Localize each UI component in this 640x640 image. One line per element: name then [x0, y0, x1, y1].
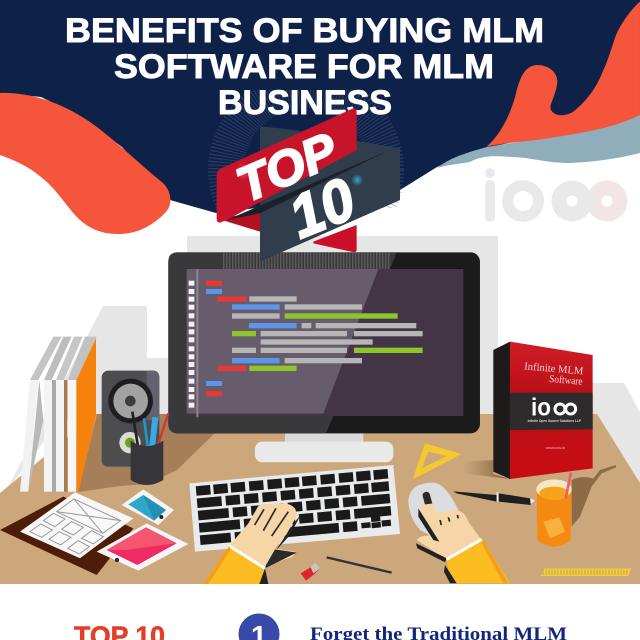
title [65, 12, 544, 122]
left desk items [0, 337, 188, 575]
line numbers [189, 281, 194, 408]
keyboard and left hand [189, 465, 400, 584]
navy wave [0, 0, 640, 213]
monitor [168, 252, 480, 462]
header background blobs [0, 0, 640, 234]
screen [187, 269, 463, 416]
books [20, 337, 97, 492]
monitor stand [255, 432, 393, 462]
sunburst rays [226, 90, 386, 250]
red ribbon tail [313, 225, 357, 252]
mouse [408, 483, 458, 543]
title: BUSINESS [218, 84, 392, 122]
10 label: 10 [280, 165, 364, 251]
right sleeve [447, 540, 510, 583]
left sleeve [203, 546, 265, 584]
code lines [206, 281, 423, 396]
right hand [416, 503, 510, 583]
glow red [235, 163, 252, 180]
software box: Software [549, 374, 583, 388]
faint logo watermark [485, 168, 620, 222]
dark ribbon front [260, 148, 400, 262]
title: BENEFITS OF BUYING MLM [65, 12, 544, 50]
red wave left [0, 93, 170, 234]
red wave right [487, 2, 640, 147]
title: SOFTWARE FOR MLM [114, 48, 494, 86]
right desk items [408, 342, 631, 583]
keyboard body [189, 465, 400, 552]
speaker [102, 371, 159, 467]
software box: www.ioss.in [546, 446, 565, 450]
pencil [327, 557, 392, 573]
keys [196, 469, 392, 545]
blue grey wave right [437, 115, 640, 168]
ruler [541, 569, 631, 576]
TOP label: TOP [229, 123, 345, 213]
wireframe sheet on mat [0, 492, 133, 575]
software box [493, 342, 593, 479]
box shadow [463, 460, 510, 479]
box logo: io [531, 394, 551, 421]
desk [0, 414, 640, 584]
box caption: Infinite Open Source Solutions LLP [528, 419, 582, 423]
grey wall shapes behind desk [5, 236, 640, 493]
left hand [203, 503, 301, 584]
glass shadow [572, 465, 616, 527]
monitor bezel [168, 252, 480, 433]
pen cup [131, 412, 168, 485]
box title: Infinite MLM [524, 361, 584, 378]
red ribbon left tail [217, 213, 260, 232]
pen [453, 491, 535, 505]
fold [227, 150, 390, 220]
phone [122, 489, 174, 525]
orange drink [536, 473, 572, 547]
glow blue [351, 174, 363, 186]
set square [413, 443, 462, 479]
eraser [301, 563, 320, 581]
red ribbon [217, 108, 357, 223]
dark ribbon back [260, 127, 400, 262]
tablet [97, 523, 188, 571]
top 10 badge [217, 108, 400, 262]
number badge [238, 614, 280, 640]
desk shadow [78, 414, 215, 492]
